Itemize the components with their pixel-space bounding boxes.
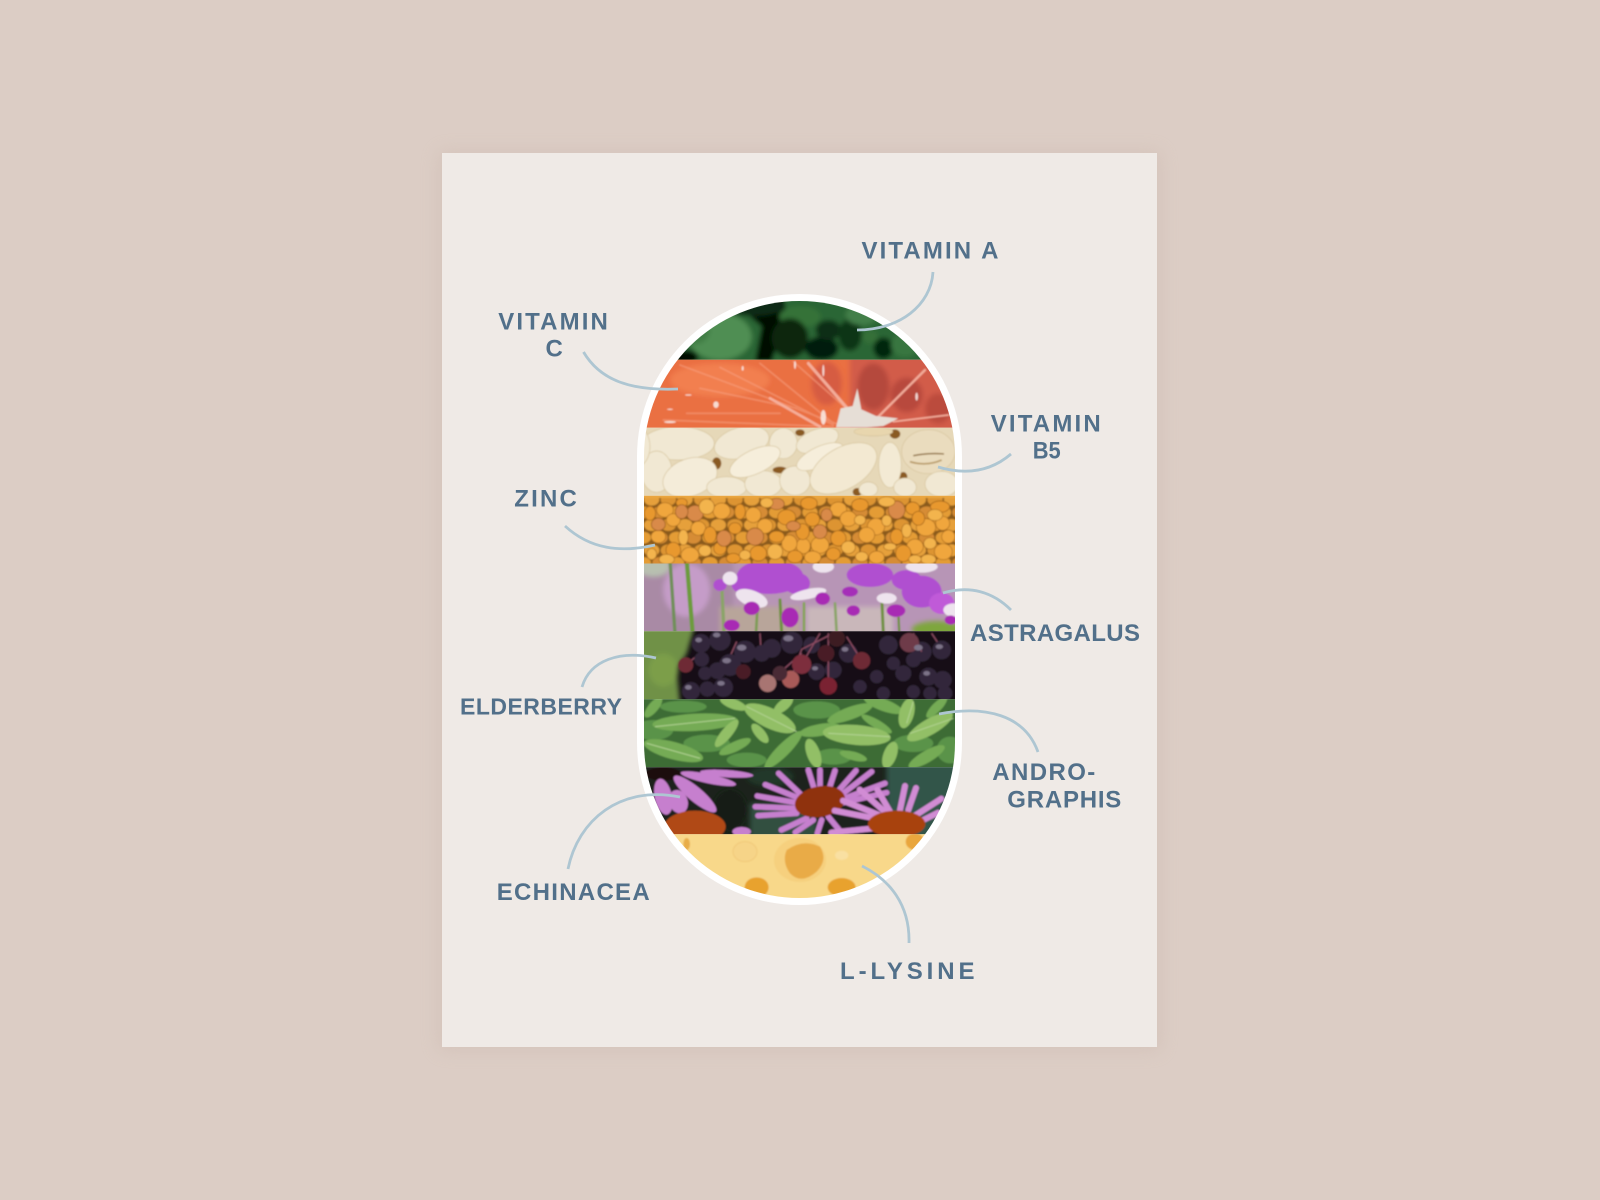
label: Andrographis: GRAPHIS xyxy=(1007,786,1121,813)
capsule photo strips xyxy=(644,301,955,898)
label: L-Lysine: L-LYSINE xyxy=(840,958,974,985)
label: Astragalus: ASTRAGALUS xyxy=(970,620,1140,647)
band: swiss cheese xyxy=(674,834,925,898)
label: Andrographis: ANDRO- xyxy=(992,759,1095,786)
band: astragalus flowers xyxy=(644,564,955,632)
label: Andrographis xyxy=(992,759,1121,813)
leader line: Vitamin A xyxy=(857,272,933,330)
band: lentils xyxy=(644,496,955,564)
label: Echinacea: ECHINACEA xyxy=(497,879,650,906)
label: Elderberry: ELDERBERRY xyxy=(460,693,622,719)
band: blood orange xyxy=(646,360,952,428)
leader line: L-Lysine xyxy=(862,866,909,943)
infographic canvas xyxy=(442,153,1157,1047)
capsule with ingredient bands xyxy=(623,290,967,908)
leader line: Echinacea xyxy=(568,795,680,869)
band: rolled oats xyxy=(644,428,955,496)
label: Vitamin A: VITAMIN A xyxy=(862,238,998,264)
band: elderberries xyxy=(644,631,955,700)
label: Zinc: ZINC xyxy=(514,486,577,513)
label: Vitamin B5: VITAMIN xyxy=(991,411,1101,438)
leader line: Vitamin C xyxy=(584,352,678,389)
band: andrographis leaves xyxy=(644,699,955,768)
label: Vitamin C xyxy=(498,308,608,363)
band: kale greens xyxy=(678,301,922,360)
leader line: Vitamin B5 xyxy=(938,454,1011,471)
label: Vitamin C: C xyxy=(546,336,563,363)
label: Vitamin B5 xyxy=(991,411,1101,464)
leader line: Elderberry xyxy=(582,655,656,687)
card shadow xyxy=(438,151,1161,1051)
capsule white outline xyxy=(637,294,962,905)
leader line: Zinc xyxy=(565,526,655,549)
label: Vitamin B5: B5 xyxy=(1033,437,1061,464)
card xyxy=(442,153,1157,1047)
leader line: Astragalus xyxy=(943,590,1011,610)
band: echinacea flowers xyxy=(646,767,953,834)
leader line: Andrographis xyxy=(939,711,1038,752)
label: Vitamin C: VITAMIN xyxy=(498,308,608,335)
